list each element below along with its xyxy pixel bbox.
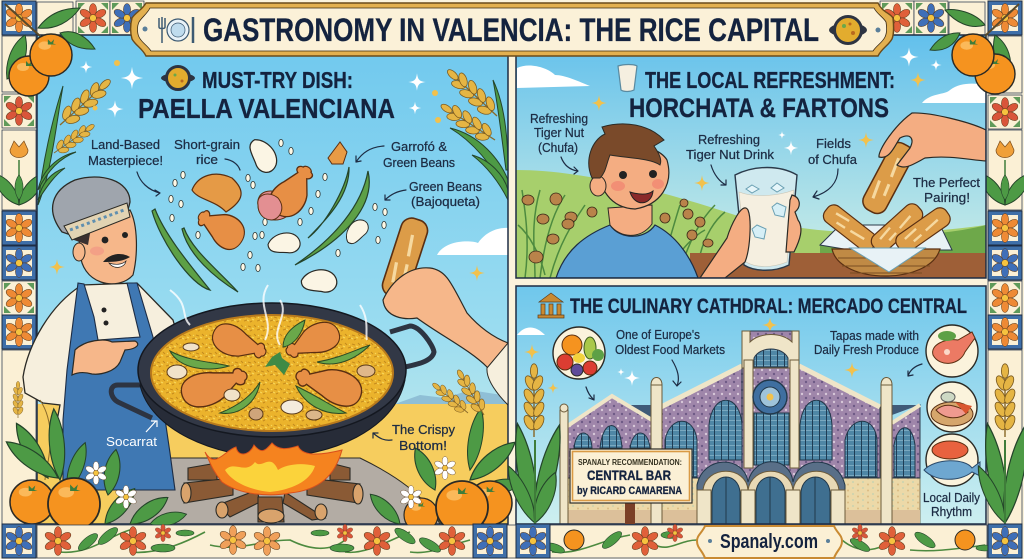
labels: horchata: Tiger Nut — [534, 125, 584, 140]
right wing — [892, 405, 920, 478]
pan handles — [111, 385, 155, 418]
icon: plate and cutlery — [142, 17, 193, 43]
labels: ingredients: Masterpiece! — [88, 153, 163, 168]
round inset: ham — [926, 325, 978, 377]
plants and oranges: bottom left — [2, 381, 188, 530]
glass of horchata — [735, 168, 797, 270]
panel frame: bottom right — [516, 286, 986, 524]
stone base — [560, 478, 920, 524]
bottom corner tiles — [2, 524, 1022, 558]
chicken legs — [208, 319, 271, 368]
clouds — [517, 66, 590, 88]
title banner — [130, 3, 894, 56]
parsley and mushrooms — [167, 343, 375, 420]
label: the crispy bottom: Bottom! — [399, 438, 447, 453]
labels: market: Rhythm — [931, 504, 972, 519]
labels: ingredients: Land-Based — [91, 137, 160, 152]
labels: horchata: (Chufa) — [538, 140, 578, 155]
labels: ingredients: Green Beans — [383, 155, 455, 170]
labels: horchata: of Chufa — [808, 152, 858, 167]
boy hair — [589, 124, 664, 178]
labels: horchata: Fields — [816, 136, 851, 151]
heading: local refreshment: THE LOCAL REFRESHMENT: — [645, 67, 895, 93]
tile border: top row — [37, 1, 985, 35]
bottom decorative strip — [37, 524, 994, 558]
sign: spanaly recommendation: SPANALY RECOMMENDATION: — [578, 458, 682, 467]
icon: glass — [618, 64, 637, 92]
boy — [556, 124, 698, 278]
sky background — [38, 36, 508, 404]
website banner — [697, 526, 842, 558]
wheat left — [38, 79, 111, 206]
central tower — [742, 331, 799, 524]
oranges: top left corner — [5, 4, 95, 96]
labels: ingredients: Garrofó & — [391, 139, 447, 154]
entrance arches — [697, 462, 845, 524]
arrows: ingredients — [137, 146, 406, 200]
title text: GASTRONOMY IN VALENCIA: THE RICE CAPITAL — [203, 12, 819, 48]
helping hand with farton — [380, 215, 508, 405]
large right gable — [799, 368, 880, 478]
labels: market: Tapas made with — [830, 328, 919, 343]
chef neck and face — [78, 210, 136, 284]
reaching hand — [879, 113, 986, 167]
sign: spanaly recommendation: CENTRAL BAR — [587, 467, 671, 483]
stone ground — [110, 458, 440, 524]
round inset: tapas plate — [927, 382, 977, 432]
rose window — [753, 380, 787, 414]
heading: local refreshment — [618, 64, 895, 123]
wheat plant: bottom panel left — [502, 364, 567, 526]
label: the crispy bottom — [373, 422, 455, 453]
steam — [170, 285, 367, 345]
panel: horchata and fartons — [516, 35, 986, 278]
glass windows — [574, 400, 915, 477]
oranges: top right corner — [930, 4, 1019, 94]
tile border: right column — [975, 1, 1024, 558]
chef pointing hand — [72, 340, 138, 375]
labels: horchata: The Perfect — [913, 175, 980, 190]
large left gable — [662, 368, 742, 478]
labels: market: Local Daily — [923, 490, 980, 505]
cloud — [437, 228, 508, 255]
label: the crispy bottom: The Crispy — [392, 422, 455, 437]
sparkles — [524, 317, 860, 394]
bread basket — [820, 200, 953, 276]
boy shirt — [556, 225, 698, 278]
arrows: horchata — [561, 157, 838, 199]
website banner: Spanaly.com — [720, 531, 818, 553]
chef jacket — [23, 283, 180, 470]
labels: horchata: Refreshing — [698, 132, 760, 147]
cloud — [517, 328, 545, 335]
labels: ingredients: rice — [196, 152, 218, 167]
heading: local refreshment: HORCHATA & FARTONS — [629, 93, 889, 123]
pan bowl — [140, 380, 405, 457]
labels: horchata: Tiger Nut Drink — [686, 147, 774, 162]
round inset: seafood — [924, 434, 980, 486]
boy neck — [608, 205, 652, 235]
labels: ingredients: (Bajoqueta) — [411, 194, 480, 209]
sign: spanaly recommendation: by RICARD CAMARENA — [577, 485, 682, 497]
heading: must-try dish — [138, 66, 395, 124]
panel: mercado central — [516, 286, 986, 524]
labels: horchata — [530, 111, 980, 205]
panel frame: left — [37, 35, 508, 524]
plants and oranges: bottom right — [366, 366, 523, 533]
wooden table — [690, 253, 986, 278]
icon: market building — [538, 293, 564, 318]
sky background — [516, 36, 986, 232]
round inset: fruit — [553, 327, 605, 379]
labels: market: One of Europe's — [616, 327, 700, 342]
distant hills — [395, 390, 508, 404]
paella pan — [111, 285, 434, 457]
chef hat — [53, 177, 130, 236]
labels: market: Daily Fresh Produce — [814, 342, 919, 357]
labels: horchata: Refreshing — [530, 111, 588, 126]
fartons — [822, 204, 874, 248]
green beans — [170, 320, 370, 413]
heading: must-try dish: PAELLA VALENCIANA — [138, 93, 395, 124]
labels: ingredients — [88, 137, 482, 209]
labels: market: Oldest Food Markets — [615, 342, 725, 357]
wheat plant: bottom panel right — [972, 364, 1024, 526]
arrow: Socarrat — [146, 421, 157, 432]
falling farton — [862, 142, 910, 214]
sparkles — [49, 60, 485, 281]
side piers — [560, 378, 892, 524]
sign: spanaly recommendation — [570, 449, 692, 524]
chef apron — [63, 283, 175, 490]
heading: must-try dish: MUST-TRY DISH: — [202, 67, 353, 93]
fire and logs — [181, 443, 363, 523]
yellow field — [37, 404, 508, 524]
green hill — [516, 170, 986, 278]
tile border: left column — [0, 1, 49, 558]
floating ingredients — [152, 135, 387, 300]
saffron rice — [151, 315, 393, 431]
panel frame: top right — [516, 35, 986, 278]
labels: ingredients: Short-grain — [174, 137, 240, 152]
market building — [560, 331, 920, 524]
arrows: market — [586, 360, 922, 400]
sky background — [516, 286, 986, 524]
sparkles — [591, 47, 942, 191]
icon: title paella pan — [829, 16, 880, 44]
boy face — [599, 145, 669, 209]
panel: paella valenciana — [37, 35, 508, 524]
labels: market — [615, 327, 980, 519]
chef — [23, 177, 180, 490]
left wing — [568, 397, 652, 478]
hand holding glass — [700, 195, 801, 278]
labels: horchata: Pairing! — [924, 190, 970, 205]
labels: ingredients: Green Beans — [409, 179, 482, 194]
chufa field — [518, 190, 725, 278]
icon: small paella pan — [161, 66, 195, 90]
label: Socarrat: Socarrat — [106, 434, 157, 449]
wheat right — [440, 69, 508, 200]
dark roofs — [631, 405, 916, 417]
